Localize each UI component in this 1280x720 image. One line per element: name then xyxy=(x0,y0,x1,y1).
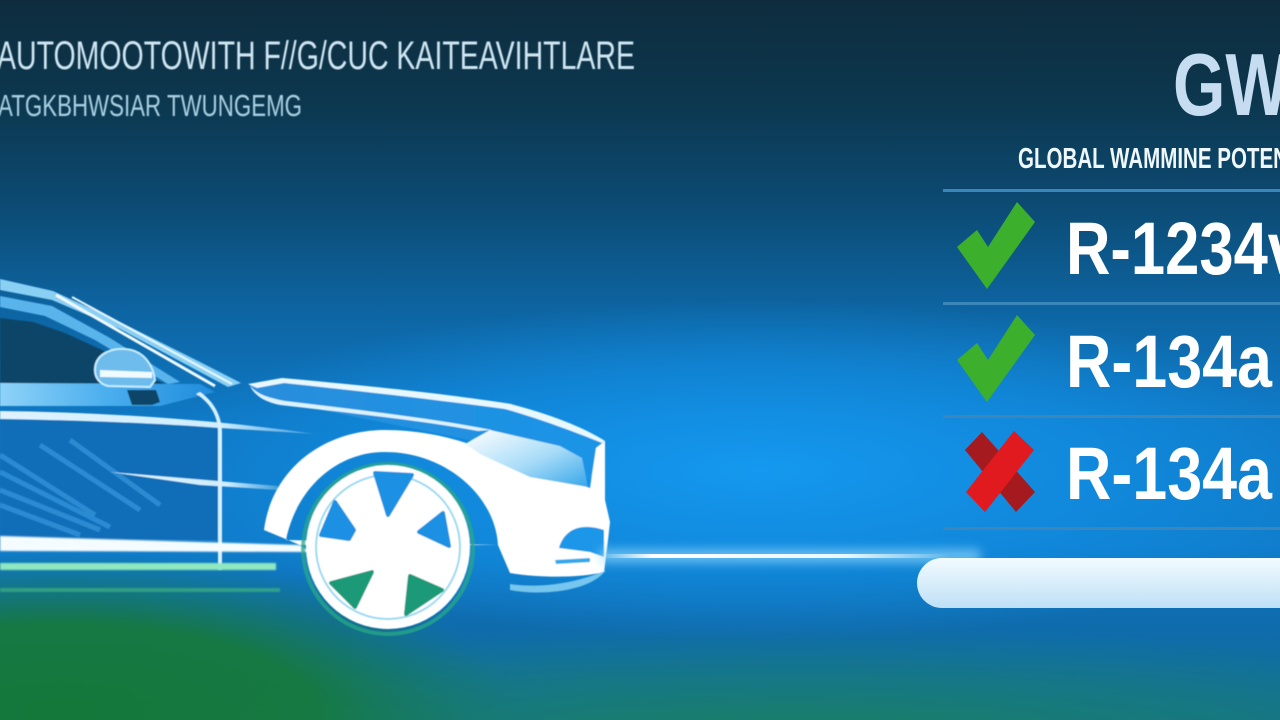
car lower air intake xyxy=(555,558,590,564)
progress pill xyxy=(917,558,1280,608)
illustration: car xyxy=(0,279,610,634)
car lower grille xyxy=(559,527,604,557)
car body lines xyxy=(0,392,315,570)
car belt line xyxy=(0,383,215,406)
car door panel with stripes xyxy=(0,412,222,540)
car front wheel xyxy=(303,464,473,634)
divider lines xyxy=(943,189,1280,530)
car under-bumper shadow xyxy=(510,570,606,593)
wheel upper cut-outs xyxy=(321,473,449,546)
icon: green check R-134a xyxy=(957,315,1035,402)
wheel lower cut-outs xyxy=(331,572,442,614)
car sill stripes xyxy=(0,536,310,592)
car roof and pillar xyxy=(0,279,241,387)
car headlight xyxy=(465,430,588,487)
car side window xyxy=(0,318,176,388)
icon: red cross xyxy=(965,431,1035,512)
light streak xyxy=(600,549,980,563)
panel: GWP refrigerants xyxy=(917,35,1280,608)
car side mirror xyxy=(95,349,160,405)
icon: green check R-1234 xyxy=(957,202,1035,289)
title: AUTOMOOTOWITH F//G/CUC KAITEAVIHTLARE xyxy=(0,34,635,78)
subtitle: ATGKBHWSIAR TWUNGEMG xyxy=(0,88,302,123)
car white front body and wheel arch xyxy=(264,430,610,577)
car hood xyxy=(248,378,605,480)
